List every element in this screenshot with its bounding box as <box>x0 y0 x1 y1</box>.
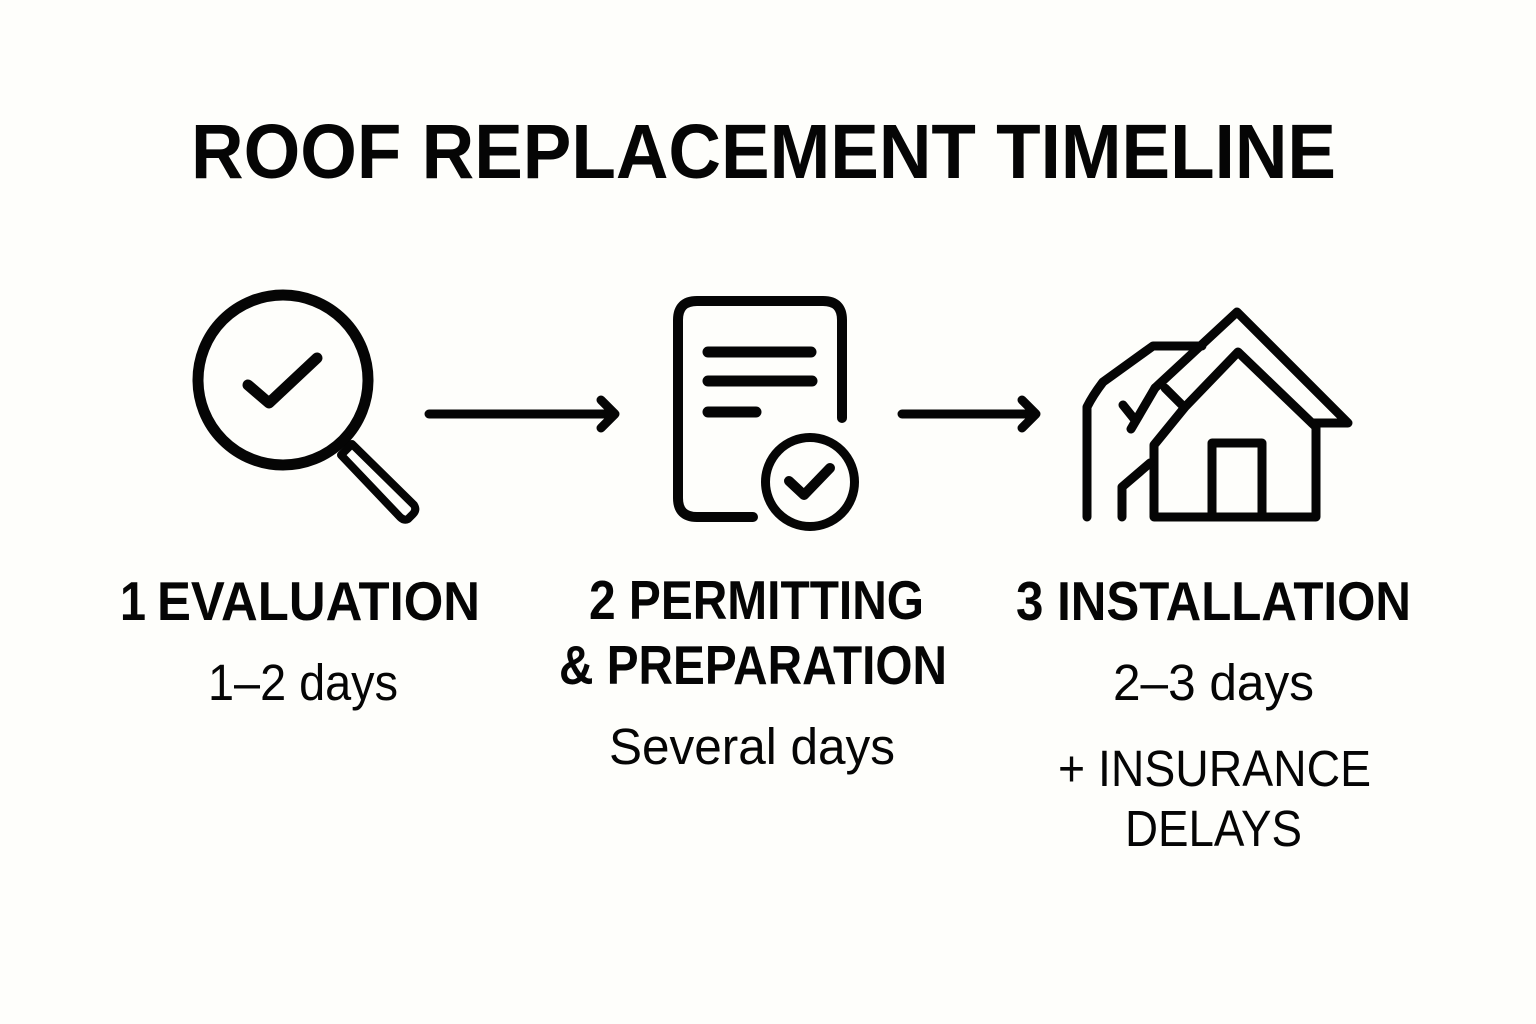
arrow: permitting to installation <box>902 400 1036 428</box>
icon: document with check <box>678 301 854 526</box>
step 3 label: + INSURANCE <box>1058 740 1371 797</box>
step 3 label: 2–3 days <box>1113 654 1314 711</box>
step 1 label: 1–2 days <box>208 654 398 711</box>
step 2 label <box>559 569 947 775</box>
icon: magnifying glass with check <box>198 295 415 520</box>
step 1 label: 1 <box>120 570 146 632</box>
arrow: evaluation to permitting <box>429 400 615 428</box>
step 1 label: EVALUATION <box>157 570 480 632</box>
step 2 label: Several days <box>609 718 895 775</box>
step 3 label: DELAYS <box>1125 800 1302 857</box>
step 2 label: & PREPARATION <box>559 634 947 696</box>
step 1 label <box>120 570 480 711</box>
step 2 label: 2 PERMITTING <box>589 569 924 631</box>
step 3 label <box>1016 570 1411 857</box>
title: ROOF REPLACEMENT TIMELINE <box>191 109 1336 195</box>
step 3 label: 3 INSTALLATION <box>1016 570 1411 632</box>
icon: house with roof and hand <box>1087 312 1348 517</box>
